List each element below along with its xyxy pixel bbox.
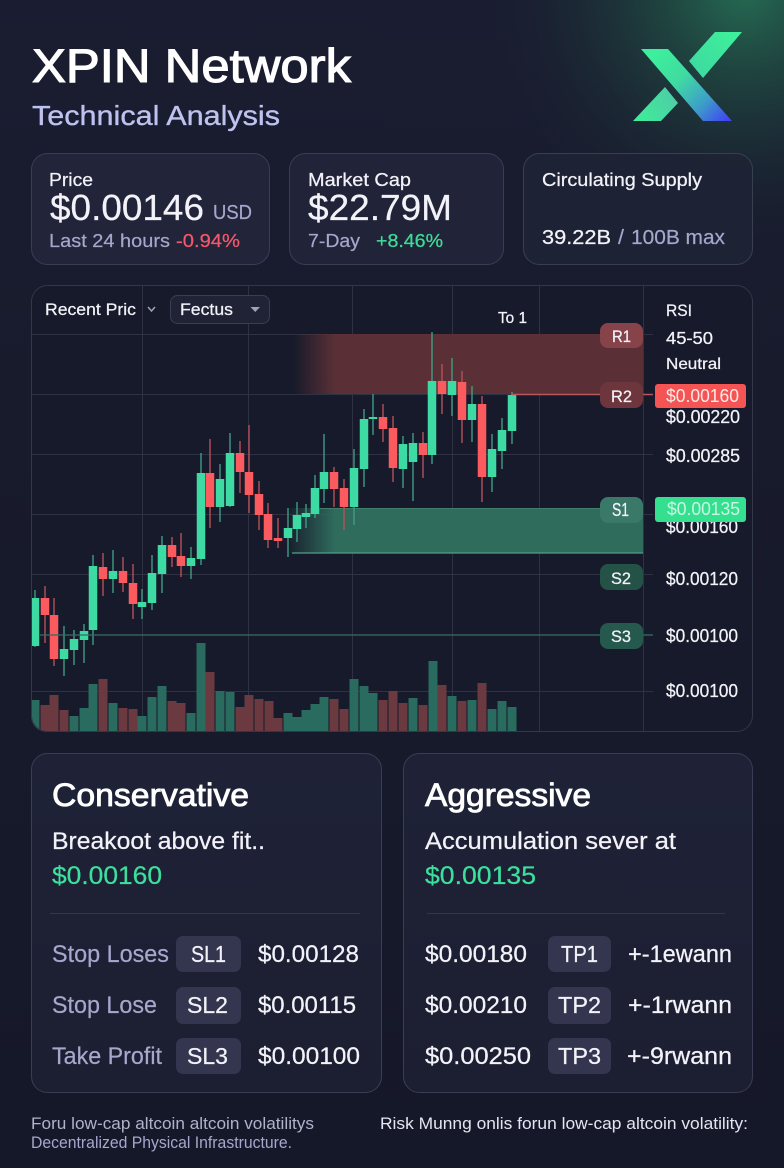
volume bars xyxy=(35,643,512,732)
panel: price: -0.94% xyxy=(176,230,240,251)
panel: price: Price xyxy=(49,170,93,190)
panel: price: $0.00146 xyxy=(50,187,204,228)
footer note: left xyxy=(31,1115,314,1152)
chart label: To 1 xyxy=(498,310,527,327)
panel: circulating supply: 100B max xyxy=(631,227,725,249)
row: SL3: Take Profit xyxy=(52,1043,162,1070)
panel: market cap: $22.79M xyxy=(308,187,452,228)
subtitle: Technical Analysis xyxy=(32,100,280,131)
price axis: $0.00120 xyxy=(666,569,738,589)
level S3 xyxy=(600,623,643,649)
resistance zone xyxy=(293,334,643,394)
panel: price: USD xyxy=(213,202,252,224)
green corner glow xyxy=(0,0,784,300)
entry text: Accumulation sever at xyxy=(425,828,676,855)
level S3: S3 xyxy=(611,627,631,646)
level R1: R1 xyxy=(612,327,631,346)
tag: support price xyxy=(655,497,746,522)
entry price: $0.00160 xyxy=(52,862,162,890)
footer note: left: Decentralized Physical Infrastructure. xyxy=(31,1134,292,1152)
panel: price xyxy=(32,154,270,264)
row: SL2 xyxy=(52,987,356,1024)
candlesticks xyxy=(35,332,512,676)
level R2 xyxy=(600,382,643,408)
tag: support price: $0.00135 xyxy=(667,499,740,519)
level R2: R2 xyxy=(611,387,632,406)
row: SL1: $0.00128 xyxy=(258,941,359,968)
row: TP1: +-1ewann xyxy=(628,941,732,968)
icon: XPIN logo xyxy=(633,32,742,121)
panel: circulating supply xyxy=(524,154,752,264)
level S1 xyxy=(600,497,643,523)
panel: circulating supply: 39.22B xyxy=(542,227,611,249)
row: TP2 xyxy=(425,987,732,1024)
filter dropdown: Fectus xyxy=(180,300,233,319)
RSI readout: 45-50 xyxy=(666,328,713,348)
panel: conservative xyxy=(32,754,382,1092)
row: TP2: TP2 xyxy=(558,992,601,1018)
entry text: Breakoot above fit.. xyxy=(52,828,265,855)
support line S3 xyxy=(40,634,653,636)
range dropdown: Recent Pric xyxy=(45,300,137,319)
RSI readout: RSI xyxy=(666,301,692,320)
row: SL2: $0.00115 xyxy=(258,992,356,1019)
panel: market cap: 7-Day xyxy=(308,230,361,251)
row: SL1 xyxy=(52,936,359,972)
panel: market cap: Market Cap xyxy=(308,170,411,190)
panel: aggressive xyxy=(404,754,752,1092)
panel border xyxy=(32,286,752,732)
panel: circulating supply: Circulating Supply xyxy=(542,170,702,190)
footer note: right: Risk Munng onlis forun low-cap altcoin volatility: xyxy=(380,1115,748,1133)
price axis: $0.00285 xyxy=(666,446,740,466)
panel: market cap: +8.46% xyxy=(376,230,443,251)
level S1: S1 xyxy=(612,500,629,520)
row: SL1: Stop Loses xyxy=(52,941,169,968)
row: TP3: +-9rwann xyxy=(627,1043,732,1070)
price axis: $0.00160 xyxy=(666,517,738,537)
row: TP2: +-1rwann xyxy=(628,992,732,1019)
support zone xyxy=(290,508,643,553)
row: SL3: $0.00100 xyxy=(258,1043,360,1070)
row: TP1: TP1 xyxy=(561,941,598,967)
price axis xyxy=(655,384,746,701)
panel: market cap xyxy=(290,154,504,264)
row: TP1 xyxy=(425,936,732,972)
title: XPIN Network xyxy=(32,39,352,92)
level S2: S2 xyxy=(611,569,631,588)
heading: Aggressive xyxy=(425,777,591,813)
price axis: $0.00100 xyxy=(666,681,738,701)
tag: resistance price xyxy=(655,384,746,408)
row: SL1: SL1 xyxy=(191,941,226,967)
row: TP3 xyxy=(425,1038,732,1074)
row: SL2: SL2 xyxy=(187,992,228,1018)
row: TP1: $0.00180 xyxy=(425,941,527,968)
tag: resistance price: $0.00160 xyxy=(666,386,739,406)
panel: circulating supply: / xyxy=(618,227,624,249)
row: SL3 xyxy=(52,1038,360,1074)
entry price: $0.00135 xyxy=(425,862,536,890)
RSI readout xyxy=(666,301,721,373)
row: TP3: $0.00250 xyxy=(425,1043,531,1070)
panel: price chart xyxy=(31,285,753,732)
heading: Conservative xyxy=(52,777,249,813)
level S2 xyxy=(600,564,643,590)
row: TP2: $0.00210 xyxy=(425,992,527,1019)
row: SL3: SL3 xyxy=(187,1043,228,1069)
footer note: left: Foru low-cap altcoin altcoin volatilitys xyxy=(31,1115,314,1133)
price axis: $0.00220 xyxy=(666,407,740,427)
panel: price: Last 24 hours xyxy=(49,230,170,251)
price axis: $0.00100 xyxy=(666,626,738,646)
level R1 xyxy=(600,323,643,348)
resistance line R2 xyxy=(512,394,653,396)
RSI readout: Neutral xyxy=(666,356,721,373)
filter dropdown xyxy=(170,296,270,324)
row: TP3: TP3 xyxy=(558,1043,601,1069)
row: SL2: Stop Lose xyxy=(52,992,157,1019)
